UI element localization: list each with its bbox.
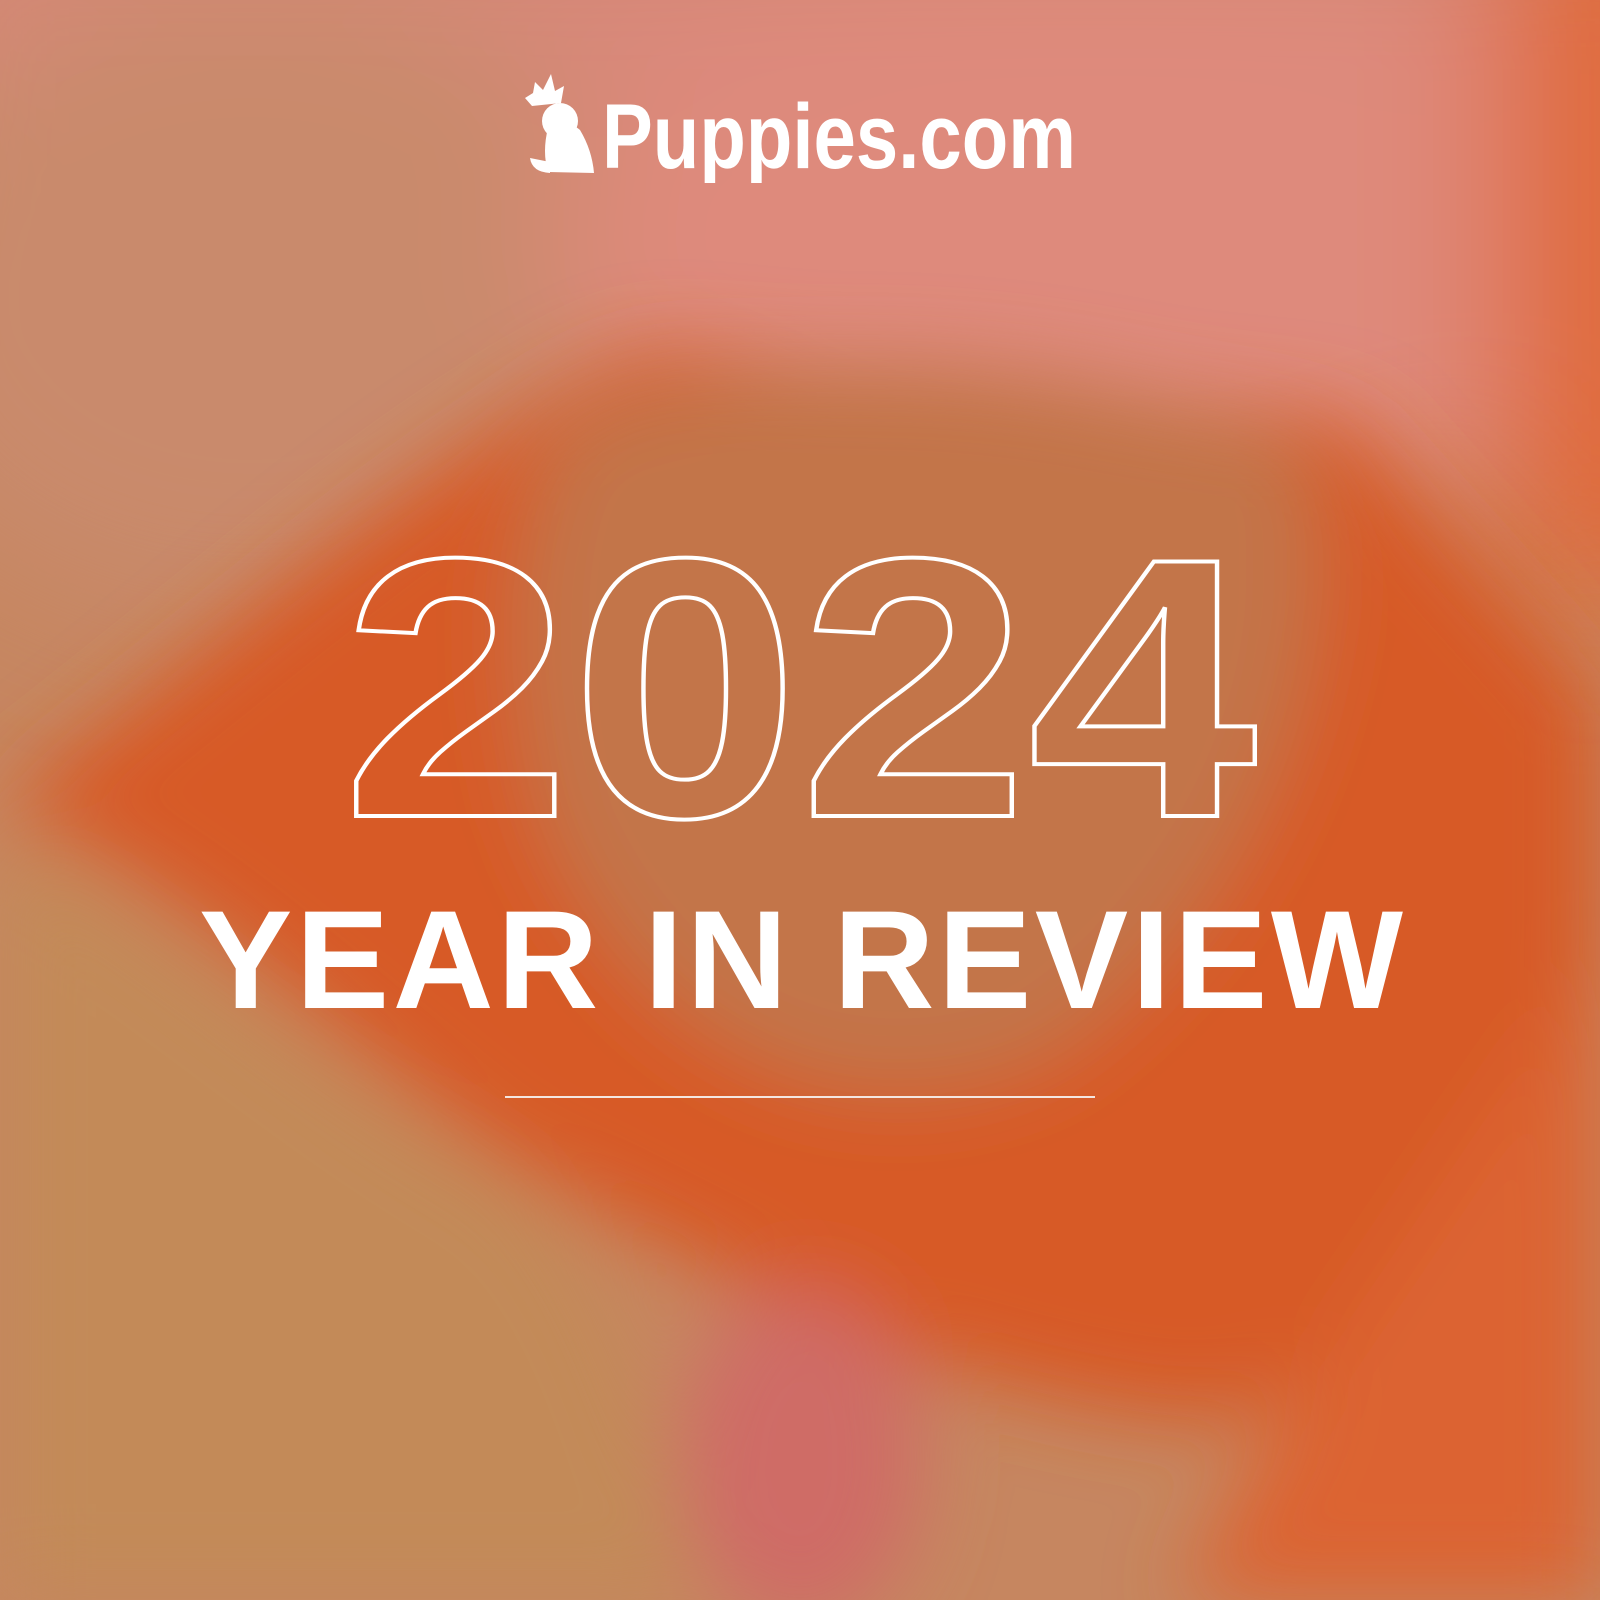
divider line (505, 1096, 1095, 1098)
logo (525, 74, 1076, 183)
icon: puppy with crown (525, 74, 594, 173)
